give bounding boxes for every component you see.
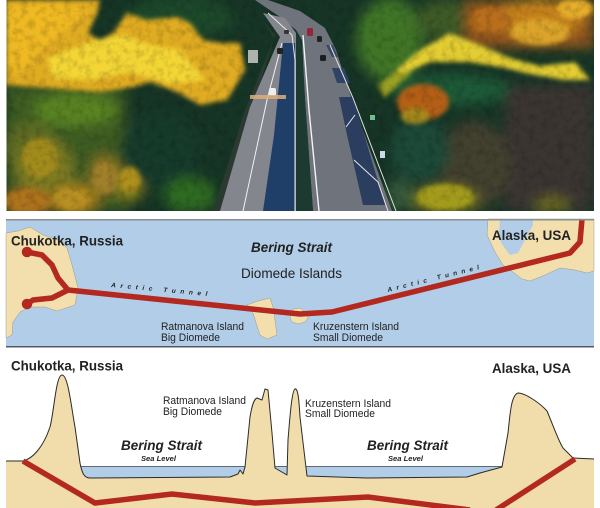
forest colour masses (2, 0, 594, 221)
sea level line (81, 466, 502, 467)
water (82, 467, 500, 478)
label: Bering Strait left: Bering Strait (121, 438, 203, 453)
label: Alaska: Alaska, USA (492, 228, 571, 243)
label: Ratmanova: Ratmanova Island (163, 395, 246, 407)
label: Sea Level left: Sea Level (141, 456, 177, 463)
photo: autumn forest highway (2, 0, 594, 221)
land: Chukotka (6, 227, 78, 338)
label: Alaska: Alaska, USA (492, 361, 571, 376)
tunnel route on map (24, 219, 582, 314)
label: Kruzenstern: Kruzenstern Island (305, 398, 391, 410)
label: Bering Strait right: Bering Strait (367, 438, 449, 453)
land: Alaska (487, 219, 594, 281)
terrain outline (6, 375, 594, 478)
island: Kruzenstern (290, 308, 308, 324)
label: Bering Strait: Bering Strait (251, 240, 333, 255)
label: Arctic Tunnel left: Arctic Tunnel (110, 282, 212, 298)
panel: cross-section profile (6, 358, 594, 508)
panel: map of Bering Strait (6, 219, 594, 348)
label: Small Diomede: Small Diomede (305, 408, 375, 420)
cars (269, 88, 276, 96)
label: Big Diomede: Big Diomede (163, 406, 222, 418)
label: Small Diomede: Small Diomede (313, 332, 383, 344)
label: Chukotka: Chukotka, Russia (11, 358, 123, 374)
tunnel profile (23, 459, 575, 508)
label: Big Diomede: Big Diomede (161, 332, 220, 344)
label: Diomede Islands: Diomede Islands (241, 265, 342, 281)
sunlit yellow treetops (5, 0, 593, 211)
label: Arctic Tunnel right: Arctic Tunnel (386, 263, 484, 294)
highway (213, 0, 396, 211)
island: Ratmanova (247, 298, 277, 339)
label: Sea Level right: Sea Level (388, 456, 424, 463)
label: Ratmanova: Ratmanova Island (161, 321, 244, 333)
label: Kruzenstern: Kruzenstern Island (313, 321, 399, 333)
terrain (6, 375, 594, 508)
label: Chukotka: Chukotka, Russia (11, 234, 123, 248)
